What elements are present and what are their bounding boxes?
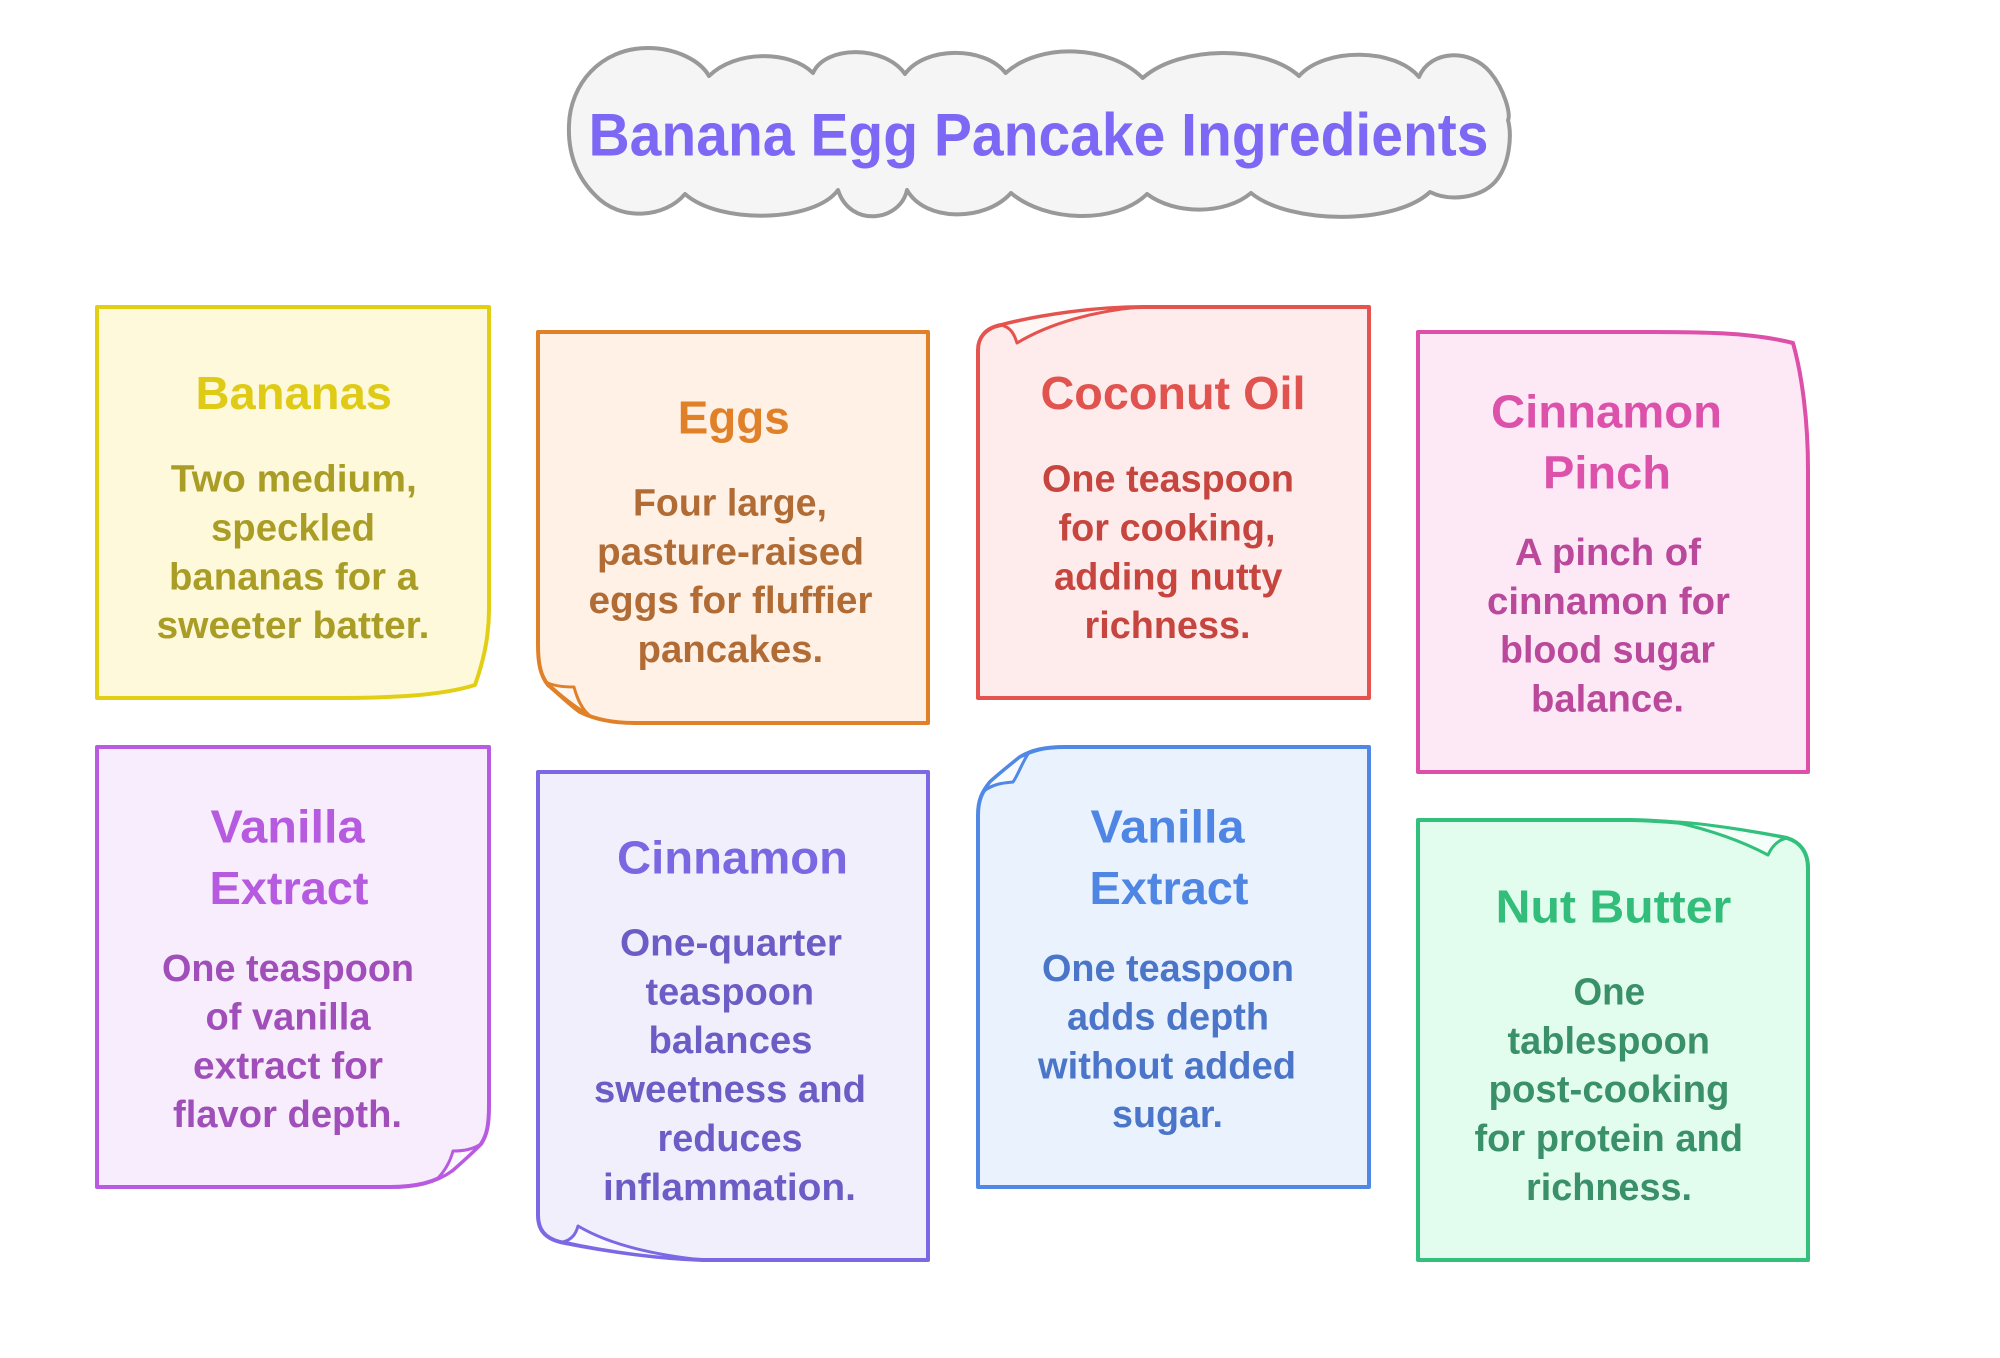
description: coconut oil: for cooking, <box>1058 508 1276 550</box>
panel: cinnamon pinch <box>1418 332 1808 772</box>
page curl <box>546 682 589 715</box>
heading: bananas: Bananas <box>196 367 392 419</box>
title cloud <box>569 48 1510 217</box>
description: vanilla extract blue: adds depth <box>1067 997 1269 1039</box>
panel: nut butter <box>1418 820 1808 1260</box>
card shape <box>1418 332 1808 772</box>
description: coconut oil: richness. <box>1084 605 1250 647</box>
panel: eggs <box>538 332 928 723</box>
card shape <box>978 747 1369 1187</box>
heading: vanilla extract blue <box>1090 801 1248 914</box>
card shape <box>538 772 928 1260</box>
card shape <box>1418 820 1808 1260</box>
description: cinnamon <box>594 922 866 1209</box>
description: vanilla extract blue <box>1037 948 1296 1136</box>
description: nut butter <box>1474 972 1743 1209</box>
description: eggs: pancakes. <box>638 629 823 671</box>
description: eggs: eggs for fluffier <box>588 580 873 622</box>
heading: vanilla extract blue: Extract <box>1090 862 1248 914</box>
description: bananas: Two medium, <box>171 459 417 501</box>
heading: nut butter: Nut Butter <box>1496 880 1731 932</box>
description: coconut oil: adding nutty <box>1054 556 1282 598</box>
card shape <box>978 307 1369 698</box>
description: bananas: speckled <box>211 508 375 550</box>
cloud shape <box>569 48 1510 217</box>
page curl <box>1675 822 1787 855</box>
page curl <box>1001 307 1140 343</box>
description: cinnamon pinch: blood sugar <box>1500 630 1715 672</box>
description: cinnamon: balances <box>648 1020 812 1062</box>
title: Banana Egg Pancake Ingredients <box>588 102 1488 168</box>
page curl <box>563 1226 703 1260</box>
heading: vanilla extract purple <box>210 801 368 914</box>
description: nut butter: for protein and <box>1474 1118 1743 1160</box>
heading: cinnamon pinch <box>1491 386 1722 498</box>
card shape <box>97 307 489 698</box>
description: nut butter: post-cooking <box>1488 1069 1730 1111</box>
heading: coconut oil: Coconut Oil <box>1040 367 1306 419</box>
description: vanilla extract purple: of vanilla <box>206 997 371 1039</box>
description: coconut oil <box>1042 459 1294 647</box>
description: cinnamon pinch: balance. <box>1531 678 1684 720</box>
description: eggs <box>588 482 873 671</box>
description: cinnamon pinch <box>1487 532 1730 720</box>
description: nut butter: One <box>1574 972 1645 1014</box>
description: bananas <box>156 459 430 647</box>
description: bananas: sweeter batter. <box>156 605 430 647</box>
panel: bananas <box>97 307 489 698</box>
description: nut butter: richness. <box>1526 1167 1692 1209</box>
description: cinnamon: teaspoon <box>646 971 814 1013</box>
heading: vanilla extract purple: Extract <box>210 862 368 914</box>
description: vanilla extract purple <box>162 948 414 1136</box>
description: cinnamon pinch: cinnamon for <box>1487 581 1730 623</box>
description: vanilla extract purple: flavor depth. <box>173 1094 402 1136</box>
description: nut butter: tablespoon <box>1508 1020 1710 1062</box>
description: vanilla extract blue: One teaspoon <box>1042 948 1294 990</box>
panel: vanilla extract blue <box>978 747 1369 1187</box>
panel: vanilla extract purple <box>97 747 489 1187</box>
page curl <box>437 1144 481 1179</box>
description: vanilla extract purple: One teaspoon <box>162 948 414 990</box>
description: cinnamon: One-quarter <box>620 922 842 964</box>
card shape <box>97 747 489 1187</box>
description: vanilla extract blue: sugar. <box>1112 1094 1223 1136</box>
heading: cinnamon: Cinnamon <box>617 832 848 884</box>
heading: cinnamon pinch: Pinch <box>1543 446 1671 498</box>
description: eggs: Four large, <box>633 482 827 524</box>
heading: vanilla extract purple: Vanilla <box>210 801 365 853</box>
heading: cinnamon pinch: Cinnamon <box>1491 386 1722 438</box>
description: cinnamon pinch: A pinch of <box>1515 532 1701 574</box>
description: cinnamon: inflammation. <box>603 1167 856 1209</box>
description: vanilla extract blue: without added <box>1037 1045 1296 1087</box>
heading: eggs: Eggs <box>678 391 790 443</box>
heading: vanilla extract blue: Vanilla <box>1090 801 1245 853</box>
panel: cinnamon <box>538 772 928 1260</box>
description: cinnamon: sweetness and <box>594 1069 866 1111</box>
description: coconut oil: One teaspoon <box>1042 459 1294 501</box>
description: eggs: pasture-raised <box>597 532 864 574</box>
page curl <box>984 754 1028 791</box>
panel: coconut oil <box>978 307 1369 698</box>
description: bananas: bananas for a <box>169 556 419 598</box>
description: vanilla extract purple: extract for <box>193 1045 383 1087</box>
description: cinnamon: reduces <box>658 1118 802 1160</box>
card shape <box>538 332 928 723</box>
